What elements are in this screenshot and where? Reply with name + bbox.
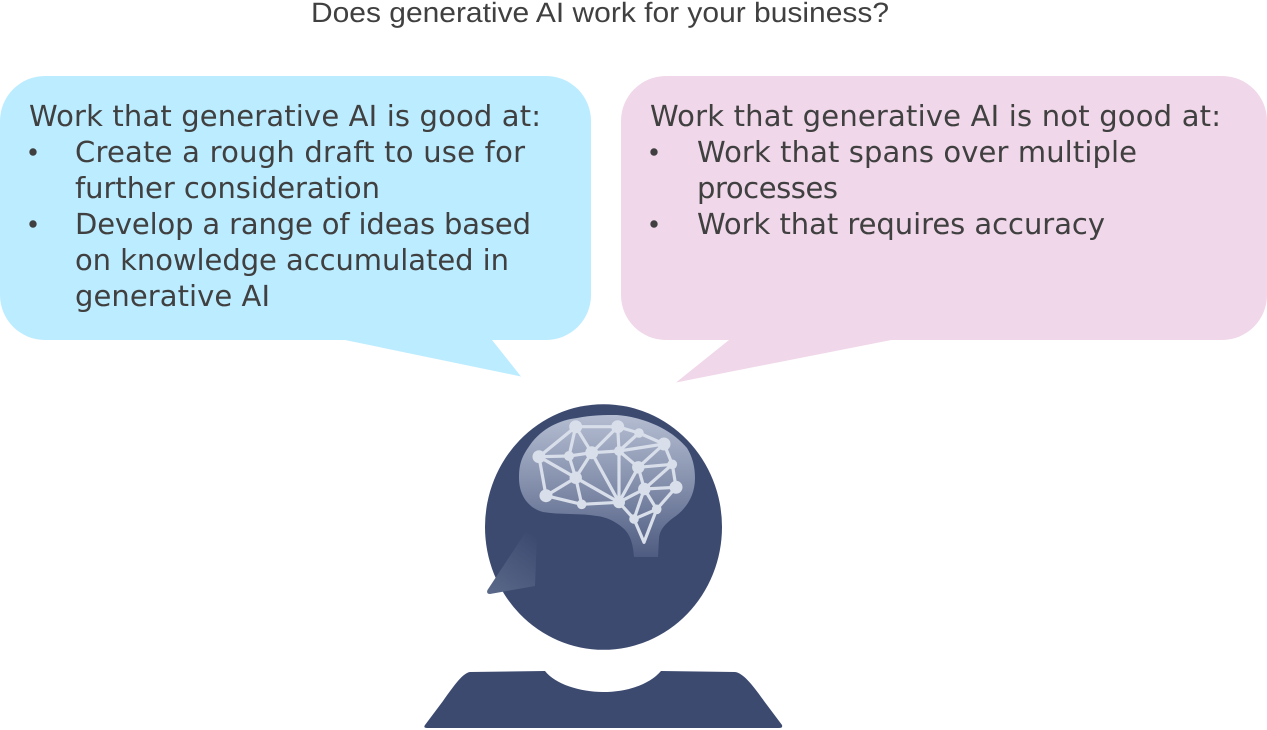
- list: not good at items: [650, 135, 1137, 241]
- microphone: [487, 533, 537, 594]
- shoulders: [424, 671, 782, 728]
- brain glow: [519, 415, 695, 557]
- speech bubble: pink: [621, 76, 1267, 382]
- list: good at items: on knowledge accumulated in: [75, 243, 509, 277]
- head: [485, 404, 722, 650]
- list: good at items: Create a rough draft to use for: [75, 135, 525, 169]
- speech bubble: blue: [0, 76, 591, 376]
- list: not good at items: processes: [697, 171, 838, 205]
- brain network: [532, 420, 682, 542]
- list: good at items: further consideration: [75, 171, 380, 205]
- panel: work generative AI is not good at: [621, 76, 1267, 382]
- list: good at items: generative AI: [75, 279, 270, 313]
- list: good at items: Develop a range of ideas based: [75, 207, 531, 241]
- list: not good at items: Work that requires accuracy: [697, 207, 1105, 241]
- heading: good at: Work that generative AI is good at:: [29, 99, 541, 133]
- list: good at items: [29, 135, 531, 313]
- icon: person with AI brain: [424, 404, 782, 728]
- list: not good at items: Work that spans over multiple: [697, 135, 1137, 169]
- heading: not good at: Work that generative AI is not good at:: [650, 99, 1221, 133]
- panel: work generative AI is good at: [0, 76, 591, 376]
